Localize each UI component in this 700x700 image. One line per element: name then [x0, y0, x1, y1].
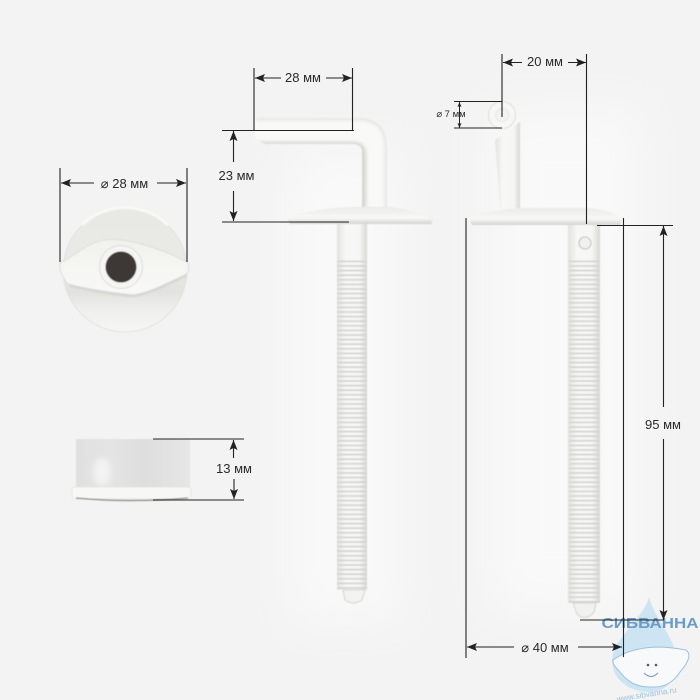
bolt 2: side view	[468, 102, 623, 618]
logo: Сибванна	[602, 597, 699, 700]
nut hole	[100, 246, 142, 288]
dimension: pin diameter 7 mm	[436, 102, 502, 128]
dimension: flange diameter 40 mm	[466, 218, 624, 658]
dimension: hook height 23 mm: 23 мм	[219, 168, 255, 183]
logo name: СИБВАННА	[602, 615, 699, 632]
nut wing	[60, 240, 189, 295]
logo tub	[613, 647, 689, 687]
hook	[254, 118, 387, 209]
flange	[286, 207, 433, 224]
threaded shaft	[568, 225, 600, 618]
dimension: offset 20 mm	[502, 54, 586, 224]
dimension: hook height 23 mm	[219, 130, 354, 222]
flange	[468, 208, 623, 225]
dimension: nut diameter 28 mm	[60, 168, 187, 262]
dimension: hook length 28 mm: 28 мм	[285, 70, 321, 85]
dimension: nut height 13 mm	[153, 439, 252, 500]
nut disc	[63, 208, 187, 332]
logo drop	[612, 597, 677, 692]
dimension: flange diameter 40 mm: ⌀ 40 мм	[521, 640, 569, 655]
dimension: pin diameter 7 mm: ⌀ 7 мм	[436, 109, 466, 120]
dimension: length 95 mm: 95 мм	[645, 417, 681, 432]
dimension: length 95 mm	[580, 226, 681, 620]
post	[495, 122, 520, 208]
dimension: nut height 13 mm: 13 мм	[216, 461, 252, 476]
nut top view	[60, 208, 189, 332]
threaded shaft	[337, 222, 367, 603]
nut side view	[72, 439, 191, 500]
dimension: hook length 28 mm	[254, 68, 352, 130]
bolt 1: L-shaped hook	[254, 118, 433, 603]
dimension: offset 20 mm: 20 мм	[527, 54, 563, 69]
dimension: nut diameter 28 mm: ⌀ 28 мм	[101, 176, 148, 191]
